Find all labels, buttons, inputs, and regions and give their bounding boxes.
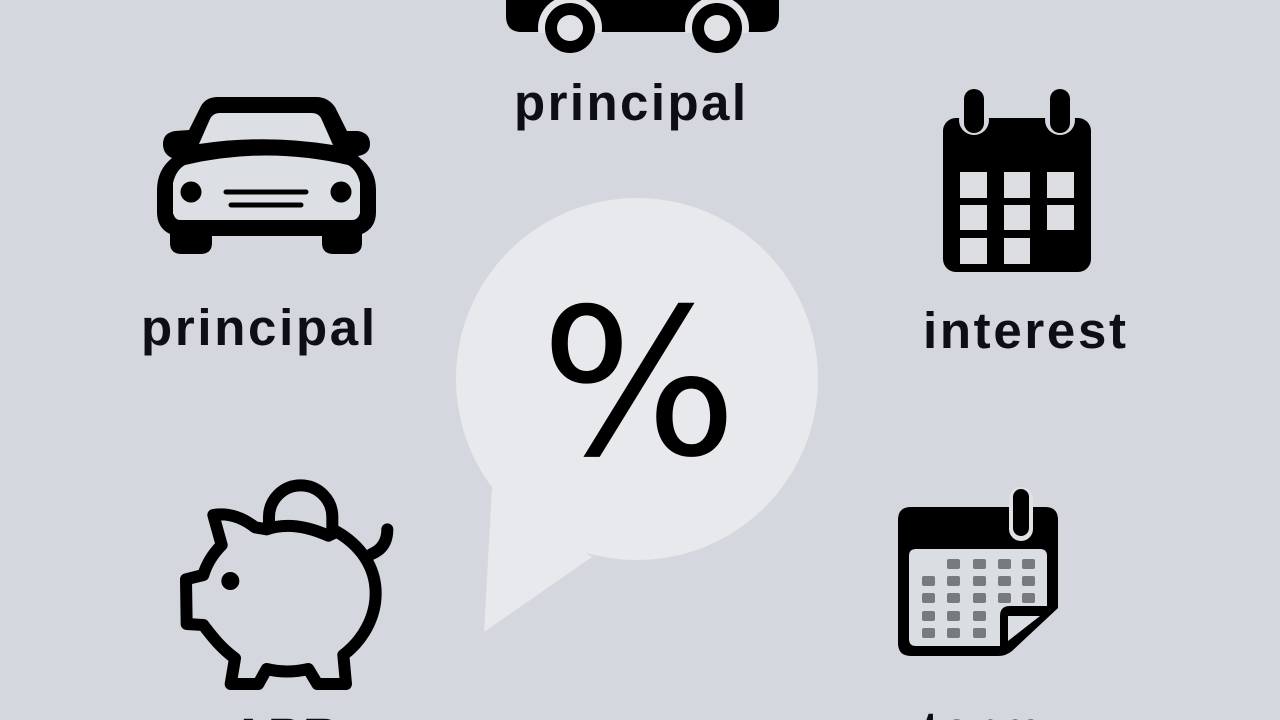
label: interest: interest (923, 302, 1126, 359)
icon: calendar with rings (943, 89, 1091, 272)
label: principal (left): principal (141, 299, 375, 356)
speech bubble (456, 198, 818, 632)
calendar date cells (922, 559, 1035, 638)
icon: car front view (157, 97, 376, 254)
icon: piggy bank with coin (186, 485, 387, 684)
percent symbol: % (540, 265, 738, 503)
icon: car side view (top) (506, 0, 779, 63)
label: principal (top): principal (514, 74, 746, 131)
icon: calendar with page fold (898, 487, 1058, 656)
